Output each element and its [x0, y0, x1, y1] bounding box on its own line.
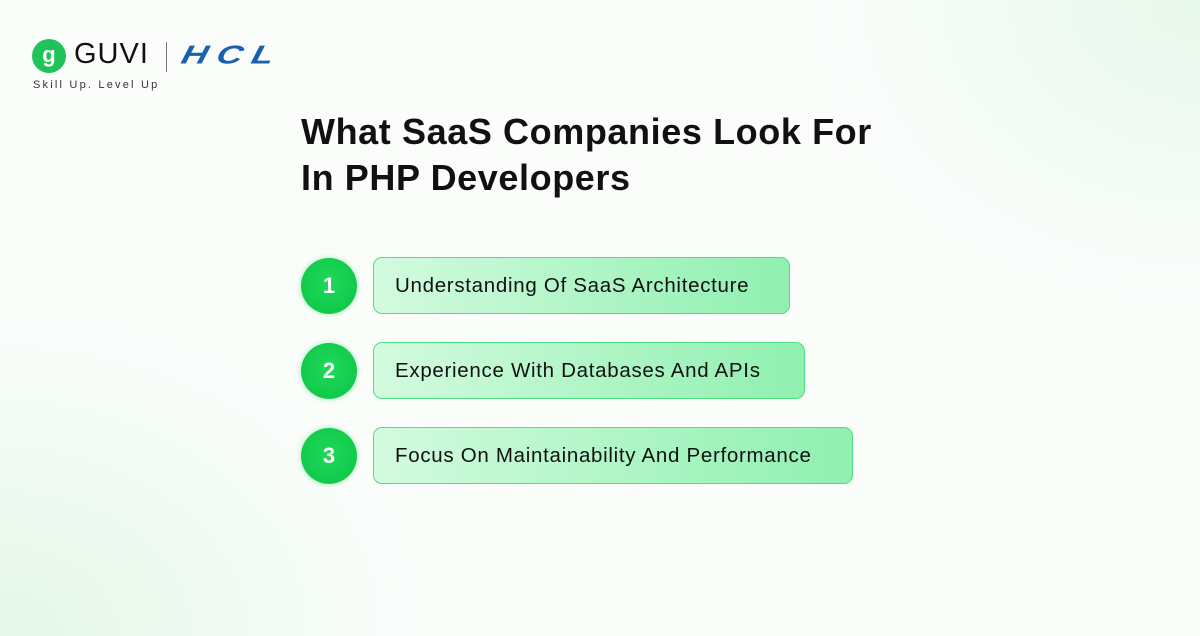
icon: guvi: g [42, 42, 56, 67]
hcl wordmark: HCL [178, 40, 287, 69]
tagline: Skill Up. Level Up [33, 79, 159, 91]
item 1: 1 [323, 273, 335, 298]
item 3: Focus On Maintainability And Performance [395, 444, 812, 466]
item 1: Understanding Of SaaS Architecture [395, 274, 749, 296]
item 2: 2 [323, 358, 335, 383]
item 1 [298, 254, 790, 318]
item 2: Experience With Databases And APIs [395, 358, 761, 382]
title: What SaaS Companies Look For [301, 111, 872, 152]
item 3 [298, 424, 853, 488]
icon: guvi [32, 39, 66, 73]
title: In PHP Developers [301, 157, 631, 198]
item 3: 3 [323, 443, 335, 468]
guvi wordmark: GUVI [74, 38, 149, 70]
logo [32, 38, 287, 91]
title [301, 111, 872, 198]
item 2 [298, 340, 805, 402]
